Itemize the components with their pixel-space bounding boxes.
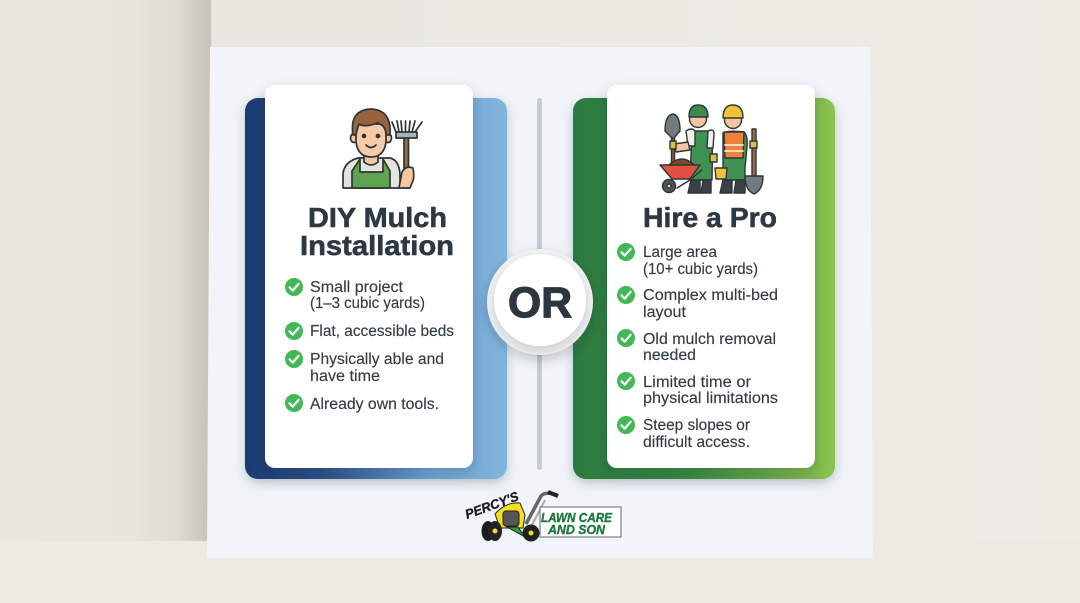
checklist: Pro: Large area	[643, 244, 717, 261]
checklist: DIY: (1–3 cubic yards)	[310, 295, 425, 312]
checklist: DIY	[285, 278, 454, 413]
OR badge: OR	[508, 279, 572, 327]
panel card: Pro	[607, 85, 815, 468]
checklist: Pro: (10+ cubic yards)	[643, 261, 758, 278]
panel: DIY Mulch Installation	[245, 85, 507, 479]
logo sign	[540, 507, 621, 537]
heading: DIY Mulch Installation	[300, 202, 454, 261]
logo wordmark: PERCY'S	[463, 488, 521, 522]
checklist: DIY: have time	[310, 368, 380, 385]
checklist: Pro: layout	[643, 304, 687, 321]
logo: Percy's Lawn Care and Son: LAWN CARE	[541, 511, 613, 525]
panel backing: blue gradient	[245, 98, 507, 479]
panel backing: green gradient	[573, 98, 835, 479]
heading: DIY Mulch Installation: Installation	[300, 230, 454, 261]
icon: two landscapers with wheelbarrow	[660, 105, 763, 194]
checklist: DIY: Small project	[310, 279, 404, 296]
heading: Hire a Pro: Hire a Pro	[643, 202, 777, 233]
checklist: DIY: Physically able and	[310, 351, 444, 368]
checklist: Pro: Complex multi-bed	[643, 287, 778, 304]
checklist: Pro: Old mulch removal	[643, 331, 776, 348]
checklist: DIY: Flat, accessible beds	[310, 323, 454, 340]
panel card: DIY	[265, 85, 473, 468]
logo: Percy's Lawn Care and Son: AND SON	[547, 523, 606, 537]
panel: white board	[207, 47, 873, 558]
checklist: Pro	[617, 243, 778, 451]
checklist: DIY: Already own tools.	[310, 396, 439, 413]
logo: Percy's Lawn Care and Son	[463, 488, 621, 541]
checklist: Pro: physical limitations	[643, 390, 778, 407]
center divider line	[537, 98, 542, 470]
checklist: Pro: Steep slopes or	[643, 417, 750, 434]
icon: yellow lawn mower	[482, 492, 558, 541]
OR badge	[487, 249, 593, 355]
checklist: Pro: difficult access.	[643, 434, 750, 451]
icon: gardener with rake	[343, 109, 422, 188]
heading: DIY Mulch Installation: DIY Mulch	[308, 202, 447, 233]
checklist: Pro: needed	[643, 347, 696, 364]
checklist: Pro: Limited time or	[643, 374, 751, 391]
panel: Hire a Pro	[573, 85, 835, 479]
